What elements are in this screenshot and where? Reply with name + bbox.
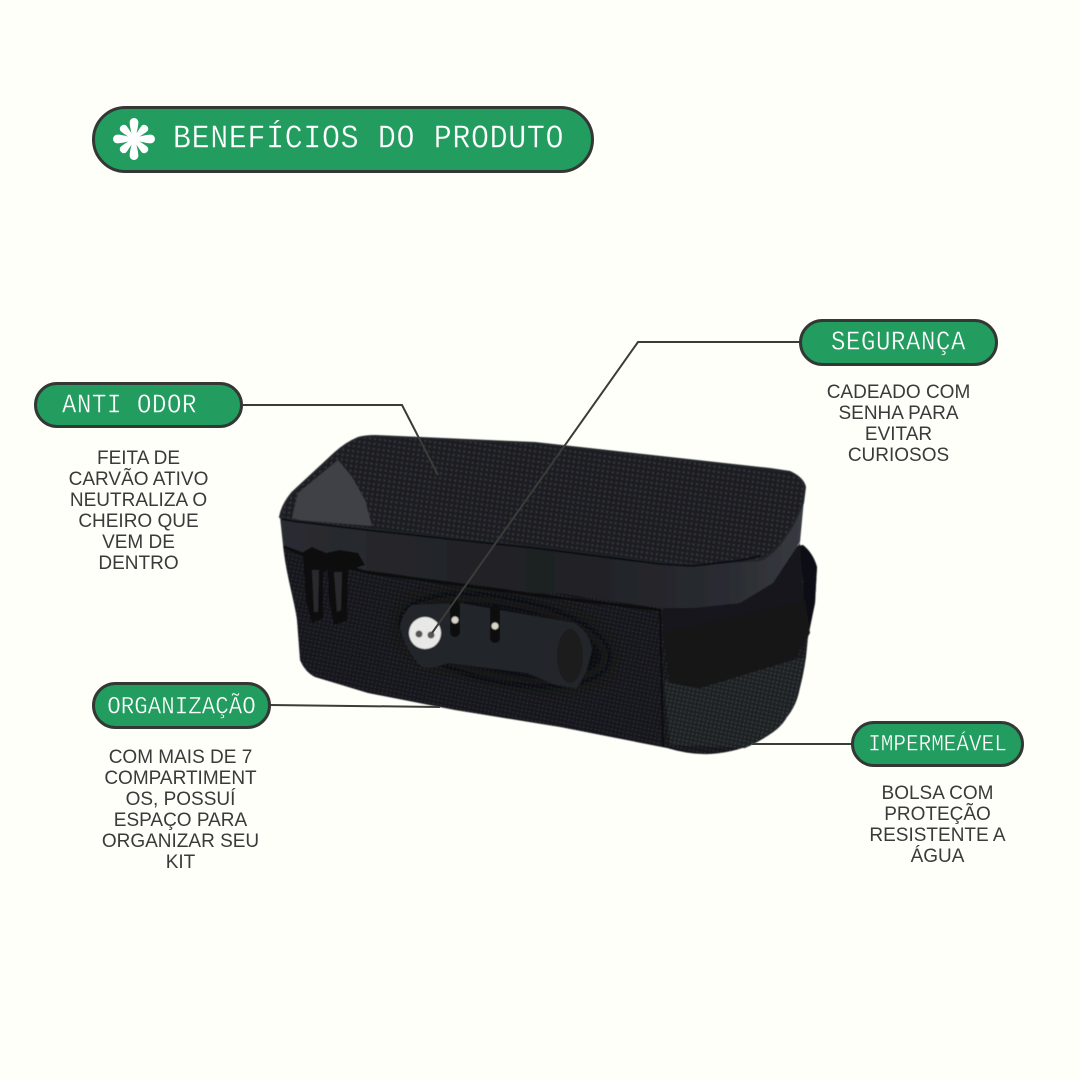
inner mesh behind strap xyxy=(663,543,803,633)
right strap loop xyxy=(795,545,817,637)
arrow: anti odor leader xyxy=(243,405,438,475)
title text: BENEFÍCIOS DO PRODUTO xyxy=(173,121,564,159)
lid corner smooth panel xyxy=(292,460,372,526)
text: anti odor description: DENTRO xyxy=(98,553,179,574)
heading pill: segurança: SEGURANÇA xyxy=(831,329,966,358)
heading pill: anti odor xyxy=(34,382,243,428)
text: anti odor description: CHEIRO QUE xyxy=(78,511,199,532)
text: organização description: OS, POSSUÍ xyxy=(126,789,235,810)
heading pill: organização xyxy=(92,682,271,729)
text: organização description: ESPAÇO PARA xyxy=(114,810,247,831)
arrow: segurança leader xyxy=(432,342,800,633)
side seam xyxy=(660,609,663,747)
heading pill: impermeável xyxy=(851,721,1024,767)
icon: white flower xyxy=(113,118,155,160)
text: organização description: COM MAIS DE 7 xyxy=(109,747,252,768)
text: anti odor description: CARVÃO ATIVO xyxy=(69,469,208,490)
text: impermeável description: RESISTENTE A xyxy=(869,825,1006,846)
arrow: impermeável leader xyxy=(752,743,852,745)
shadow around lock xyxy=(394,581,616,699)
text: impermeável description xyxy=(869,783,1006,867)
panel: organização xyxy=(92,682,271,873)
text: segurança description xyxy=(827,382,970,466)
zipper pulls xyxy=(303,547,365,625)
text: segurança description: CURIOSOS xyxy=(848,445,949,466)
heading pill: organização: ORGANIZAÇÃO xyxy=(107,693,256,721)
text: segurança description: CADEADO COM xyxy=(827,382,970,403)
panel: anti odor xyxy=(34,382,243,574)
text: anti odor description: VEM DE xyxy=(102,532,175,553)
text: impermeável description: BOLSA COM xyxy=(882,783,993,804)
lid mesh xyxy=(280,436,805,565)
text: impermeável description: PROTEÇÃO xyxy=(884,804,991,825)
text: anti odor description: FEITA DE xyxy=(97,448,180,469)
text: organização description: COMPARTIMENT xyxy=(104,768,257,789)
text: organização description: KIT xyxy=(166,852,195,873)
lock emblem xyxy=(409,617,441,649)
text: organização description xyxy=(102,747,259,873)
heading pill: impermeável: IMPERMEÁVEL xyxy=(868,733,1007,758)
text: segurança description: SENHA PARA xyxy=(838,403,959,424)
text: anti odor description xyxy=(69,448,208,574)
body xyxy=(283,545,817,754)
lid band xyxy=(280,487,805,608)
right lower lighter mesh xyxy=(664,657,806,748)
arrow: organização leader xyxy=(270,705,440,707)
zipper seam xyxy=(284,547,660,610)
text: organização description: ORGANIZAR SEU xyxy=(102,831,259,852)
heading pill: anti odor: ANTI ODOR xyxy=(62,392,197,421)
combination lock xyxy=(400,603,592,688)
text: impermeável description: ÁGUA xyxy=(911,846,964,867)
text: anti odor description: NEUTRALIZA O xyxy=(70,490,207,511)
panel: impermeável xyxy=(851,721,1024,867)
side strap xyxy=(663,600,810,688)
text: segurança description: EVITAR xyxy=(865,424,932,445)
panel: segurança xyxy=(799,319,998,466)
lid edge line xyxy=(282,519,760,566)
heading pill: segurança xyxy=(799,319,998,366)
title pill xyxy=(92,106,594,173)
